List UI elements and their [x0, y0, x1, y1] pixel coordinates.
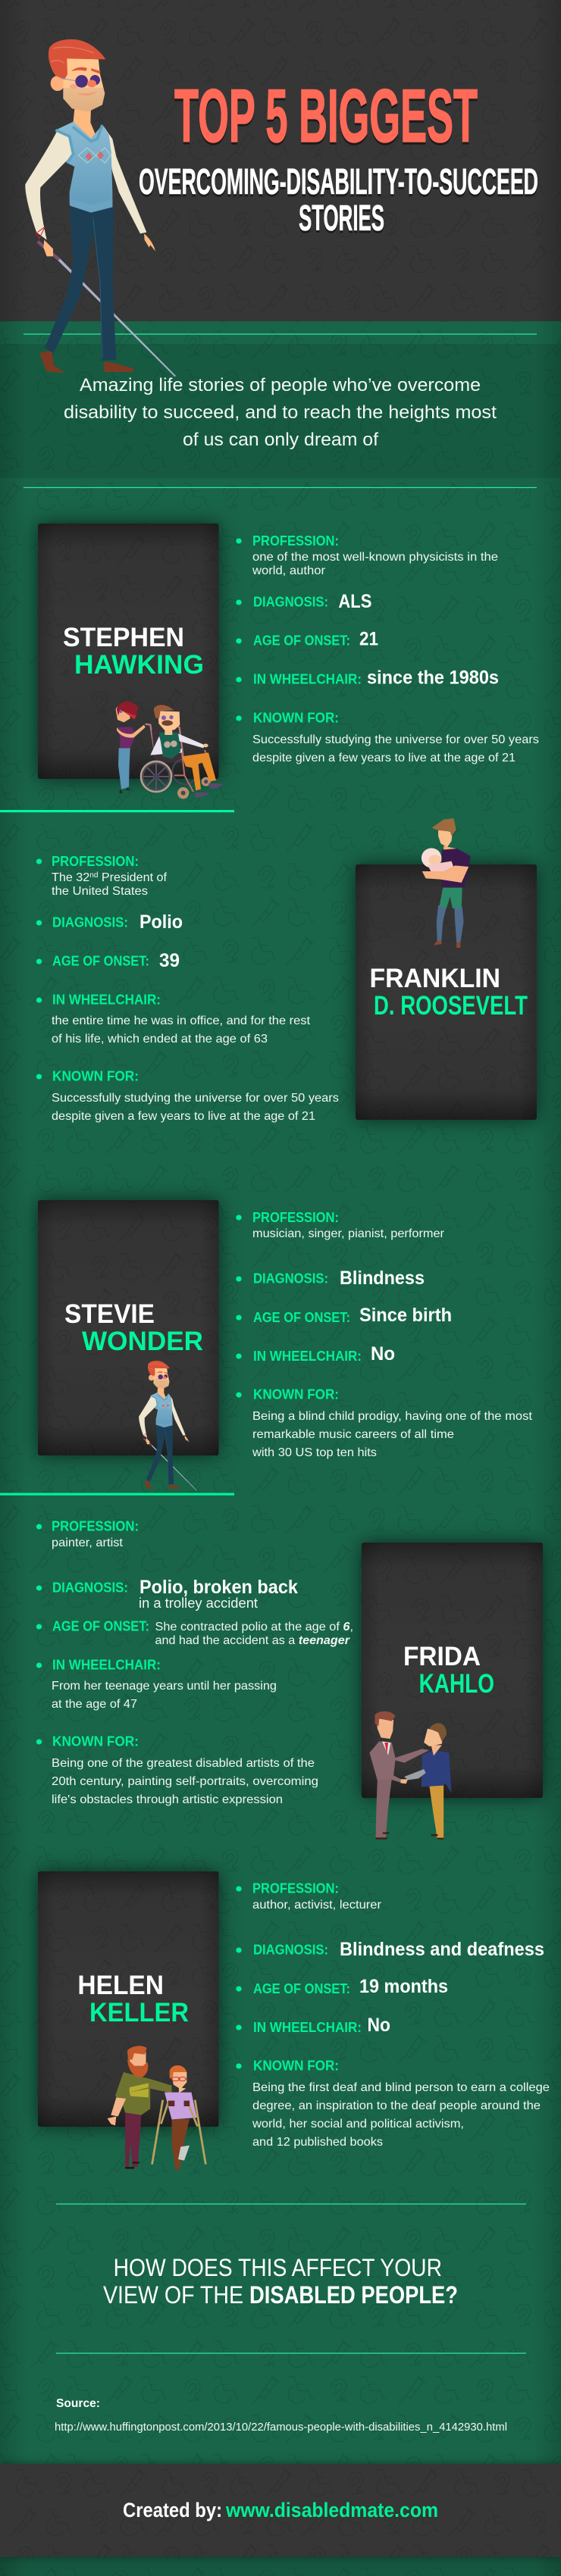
subtitle line 2: STORIES: [299, 199, 384, 239]
age of onset: [253, 1305, 452, 1326]
name: Helen: HELEN: [77, 1971, 164, 2000]
name: Hawking: HAWKING: [74, 650, 204, 680]
profession: PROFESSION:: [252, 1210, 339, 1225]
info list: Stevie Wonder: [236, 1210, 533, 1459]
known for: KNOWN FOR:: [52, 1734, 139, 1749]
section divider bar 2: [0, 1493, 234, 1496]
name: Franklin: FRANKLIN: [370, 964, 500, 993]
known for: Being one of the greatest disabled artists of the: [52, 1757, 315, 1770]
in wheelchair: IN WHEELCHAIR:: [253, 1349, 362, 1364]
diagnosis: [253, 591, 371, 612]
known for: KNOWN FOR:: [253, 2059, 339, 2074]
panel: Stevie Wonder card: [38, 1200, 218, 1455]
known for: [252, 1387, 533, 1459]
diagnosis: DIAGNOSIS:: [253, 595, 328, 610]
known for: despite given a few years to live at the age of 21: [52, 1110, 315, 1123]
known for: despite given a few years to live at the age of 21: [252, 752, 516, 764]
credit text: www.disabledmate.com: [225, 2499, 438, 2521]
header dark band: [0, 0, 561, 321]
source: http://www.huffingtonpost.com/2013/10/22/famous-people-with-disabilities_n_4142930.html: [55, 2421, 507, 2434]
diagnosis: Polio, broken back: [139, 1577, 298, 1598]
known for: Successfully studying the universe for over 50 years: [52, 1092, 339, 1105]
age of onset: 19 months: [359, 1976, 448, 1997]
profession: PROFESSION:: [52, 1519, 139, 1534]
profession: painter, artist: [52, 1537, 124, 1549]
profession: PROFESSION:: [52, 854, 139, 869]
name: Keller: KELLER: [89, 1998, 189, 2027]
profession: the United States: [52, 885, 148, 898]
known for: and 12 published books: [252, 2136, 383, 2149]
profession: nd: [89, 871, 98, 880]
info list: Franklin D. Roosevelt: [36, 854, 339, 1123]
known for: life's obstacles through artistic expression: [52, 1793, 283, 1806]
illustration: man with white cane: [25, 39, 176, 377]
known for: Being a blind child prodigy, having one of the most: [252, 1410, 533, 1423]
in wheelchair: IN WHEELCHAIR:: [52, 1658, 161, 1673]
in wheelchair: IN WHEELCHAIR:: [52, 993, 161, 1008]
diagnosis: DIAGNOSIS:: [253, 1271, 328, 1286]
in wheelchair: [52, 1658, 277, 1711]
known for: with 30 US top ten hits: [252, 1446, 377, 1459]
intro text: [64, 375, 497, 450]
in wheelchair: at the age of 47: [52, 1698, 137, 1711]
in wheelchair: since the 1980s: [367, 667, 499, 689]
divider lines around closing question: [56, 2204, 526, 2353]
profession: author, activist, lecturer: [252, 1899, 382, 1912]
age of onset: AGE OF ONSET:: [52, 1619, 149, 1634]
name: Wonder: WONDER: [82, 1327, 203, 1356]
profession: world, author: [252, 564, 326, 577]
info list: Helen Keller: [236, 1881, 550, 2149]
illustration: two men shaking hands: [369, 1712, 452, 1840]
in wheelchair: No: [371, 1343, 395, 1365]
illustration: bearded man and boy on crutches: [108, 2046, 205, 2169]
diagnosis: [253, 1939, 544, 1960]
diagnosis: ALS: [338, 591, 371, 612]
in wheelchair: the entire time he was in office, and for the rest: [52, 1014, 311, 1027]
known for: [52, 1734, 318, 1806]
in wheelchair: [253, 667, 499, 689]
profession: musician, singer, pianist, performer: [252, 1227, 445, 1240]
intro text: Amazing life stories of people who’ve overcome: [80, 375, 481, 395]
intro text: of us can only dream of: [183, 430, 378, 450]
in wheelchair: No: [367, 2015, 390, 2036]
info list: Frida Kahlo: [36, 1519, 353, 1806]
in wheelchair: [253, 2015, 390, 2036]
diagnosis: DIAGNOSIS:: [253, 1943, 328, 1958]
known for: KNOWN FOR:: [52, 1069, 139, 1084]
known for: world, her social and political activism,: [252, 2118, 464, 2131]
age of onset: AGE OF ONSET:: [52, 954, 149, 969]
diagnosis: Polio: [139, 911, 183, 933]
source: [55, 2397, 507, 2434]
in wheelchair: From her teenage years until her passing: [52, 1680, 277, 1693]
profession: President of: [98, 871, 168, 884]
known for: [252, 2059, 550, 2149]
title: [139, 73, 538, 239]
intro text: disability to succeed, and to reach the heights most: [64, 402, 497, 423]
diagnosis: [253, 1268, 425, 1289]
diagnosis: Blindness: [340, 1268, 425, 1289]
age of onset: [253, 1976, 448, 1997]
age of onset: 39: [159, 950, 180, 971]
closing question: DISABLED PEOPLE?: [249, 2281, 458, 2309]
profession: [252, 1881, 382, 1912]
age of onset: Since birth: [359, 1305, 452, 1326]
illustration: man with prosthetic legs holding baby: [422, 818, 471, 948]
diagnosis: [52, 1577, 298, 1611]
panel: Stephen Hawking card: [38, 524, 218, 779]
known for: Being the first deaf and blind person to earn a college: [252, 2081, 550, 2094]
in wheelchair: IN WHEELCHAIR:: [253, 2020, 362, 2035]
profession: [52, 1519, 139, 1549]
age of onset: AGE OF ONSET:: [253, 1981, 350, 1996]
name: Stevie: STEVIE: [64, 1299, 155, 1329]
known for: remarkable music careers of all time: [252, 1428, 454, 1441]
closing question: VIEW OF THE: [103, 2281, 243, 2309]
diagnosis: [52, 911, 183, 933]
divider lines around intro: [24, 334, 537, 488]
name: Kahlo: KAHLO: [419, 1669, 494, 1699]
info list: Stephen Hawking: [236, 533, 539, 764]
age of onset: AGE OF ONSET:: [253, 633, 350, 649]
in wheelchair: of his life, which ended at the age of 63: [52, 1033, 268, 1046]
profession: PROFESSION:: [252, 1881, 339, 1896]
diagnosis: DIAGNOSIS:: [52, 1580, 128, 1596]
bullet markers: [36, 1524, 42, 1744]
known for: degree, an inspiration to the deaf people around the: [252, 2099, 541, 2112]
section divider bar 1: [0, 810, 234, 812]
profession: PROFESSION:: [252, 533, 339, 549]
known for: [252, 711, 539, 764]
known for: 20th century, painting self-portraits, overcoming: [52, 1775, 318, 1788]
in wheelchair: [52, 993, 311, 1046]
known for: Successfully studying the universe for over 50 years: [252, 733, 539, 746]
credit text: [123, 2499, 438, 2521]
in wheelchair: [253, 1343, 395, 1365]
closing question: [103, 2254, 458, 2309]
age of onset: She contracted polio at the age of 6,: [155, 1621, 353, 1633]
age of onset: [52, 950, 180, 971]
age of onset: AGE OF ONSET:: [253, 1310, 350, 1325]
illustration: small man with white cane: [139, 1361, 197, 1490]
age of onset: 21: [359, 629, 378, 650]
bullet markers: [236, 538, 242, 721]
profession: [252, 533, 498, 577]
bullet markers: [236, 1887, 242, 2068]
age of onset: [52, 1619, 353, 1647]
footer band: [0, 2464, 561, 2576]
panel: Helen Keller card: [38, 1871, 218, 2127]
diagnosis: DIAGNOSIS:: [52, 915, 128, 930]
credit text: Created by:: [123, 2499, 222, 2521]
age of onset: [253, 629, 378, 650]
illustration: woman pushing man in wheelchair: [116, 702, 224, 799]
known for: KNOWN FOR:: [253, 711, 339, 726]
name: Stephen: STEPHEN: [63, 623, 184, 652]
profession: one of the most well-known physicists in the: [252, 551, 498, 564]
bullet markers: [236, 1215, 242, 1397]
bullet markers: [36, 859, 42, 1079]
source: Source:: [56, 2397, 100, 2410]
diagnosis: in a trolley accident: [139, 1596, 258, 1611]
age of onset: and had the accident as a teenager: [155, 1634, 350, 1647]
panel: Franklin D. Roosevelt card: [356, 864, 537, 1120]
profession: The 32: [52, 871, 89, 884]
panel: Frida Kahlo card: [362, 1543, 543, 1798]
profession: [252, 1210, 445, 1240]
closing question: HOW DOES THIS AFFECT YOUR: [114, 2254, 442, 2281]
known for: [52, 1069, 339, 1123]
diagnosis: Blindness and deafness: [340, 1939, 544, 1960]
known for: KNOWN FOR:: [253, 1387, 339, 1402]
name: Frida: FRIDA: [403, 1642, 481, 1671]
profession: [52, 854, 168, 898]
in wheelchair: IN WHEELCHAIR:: [253, 672, 362, 687]
